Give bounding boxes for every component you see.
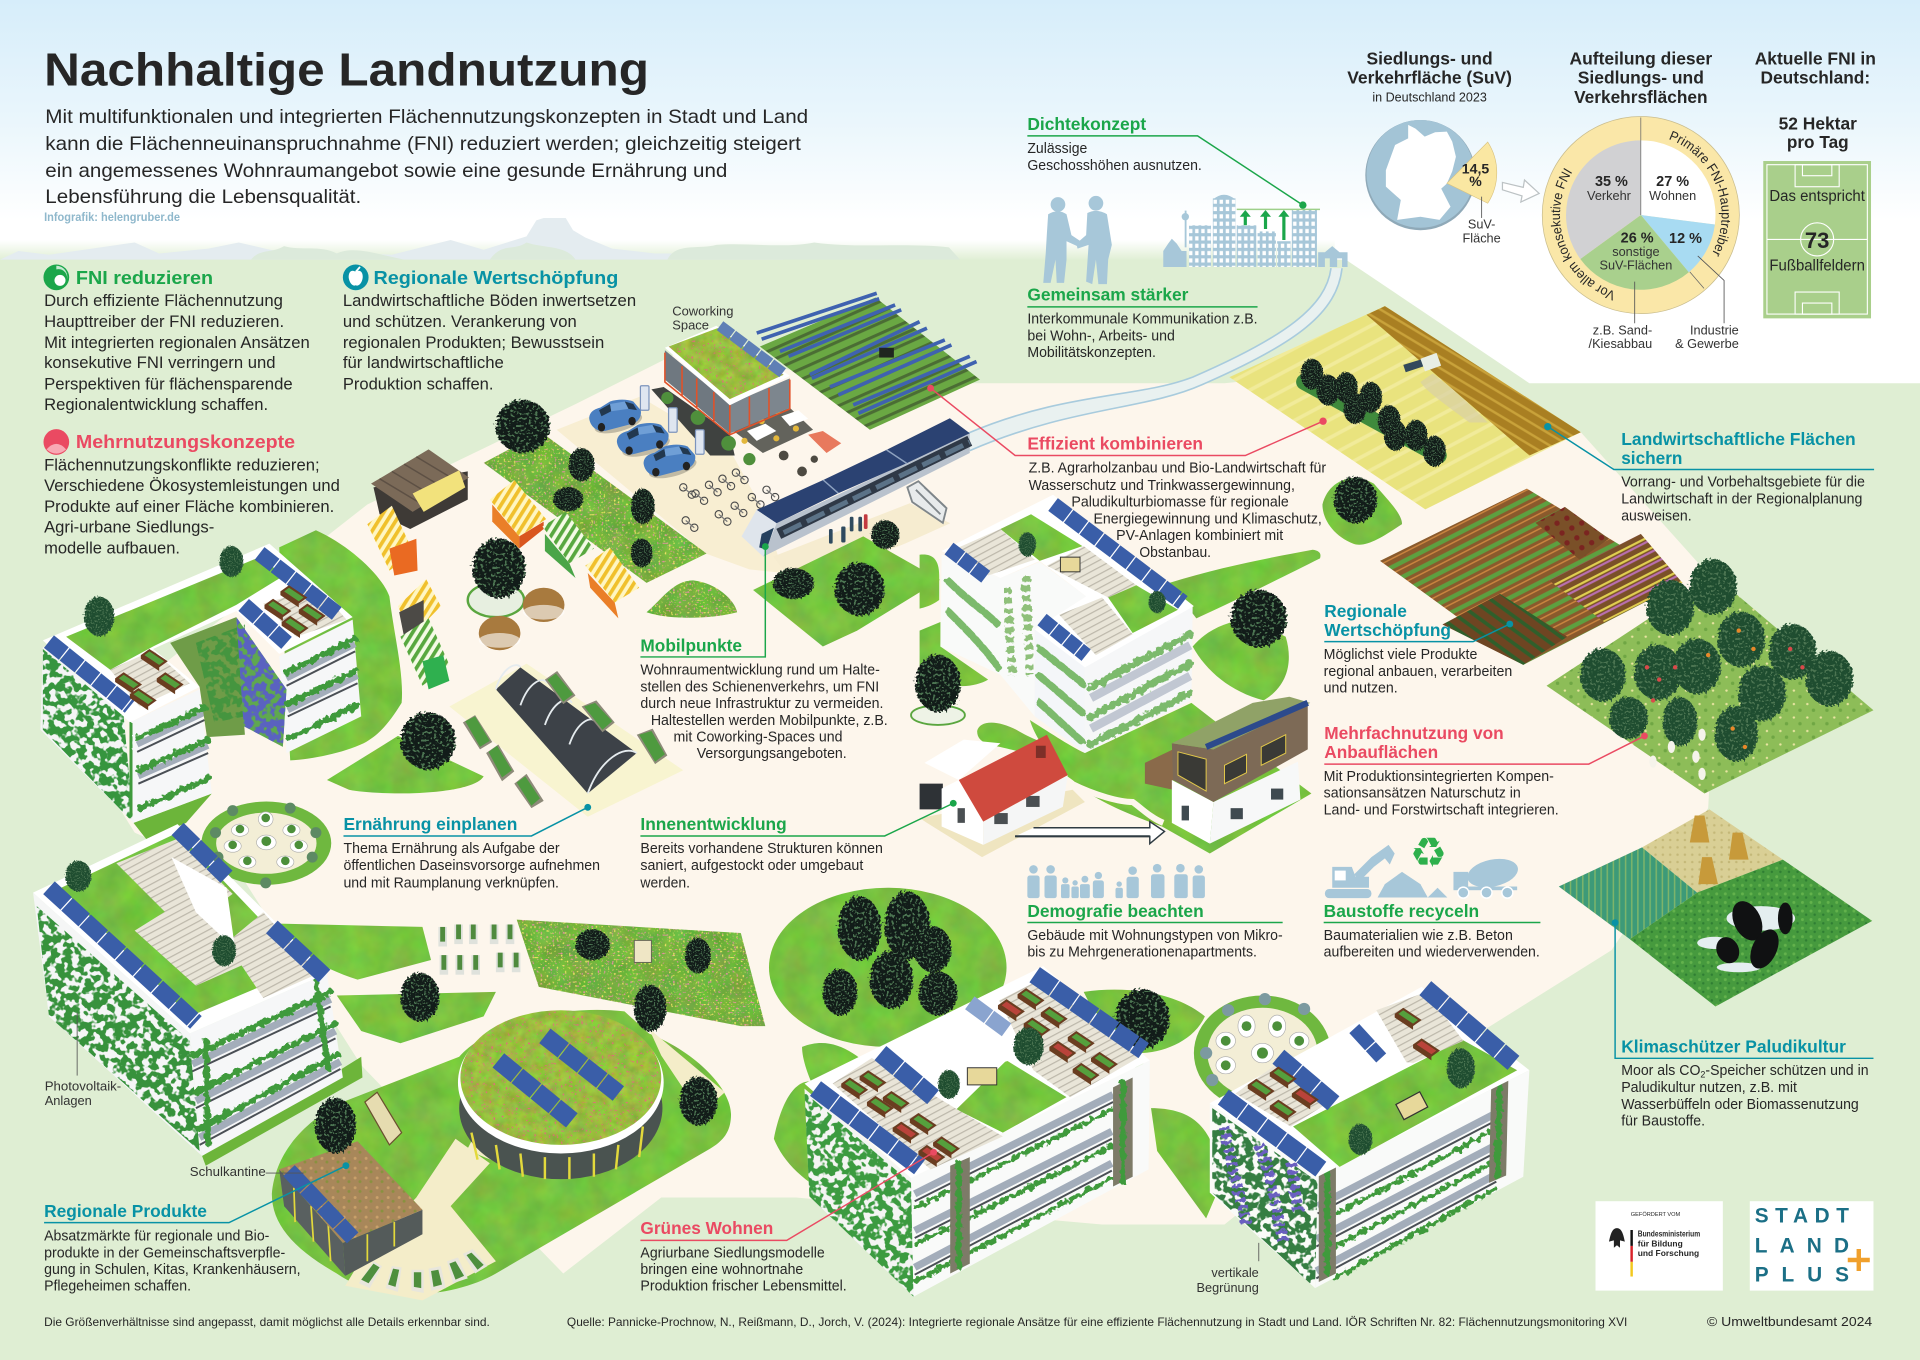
commuters [829,514,868,544]
building: middle left [33,824,362,1166]
callout: Effizient kombinieren [927,385,1327,561]
callout: Regionale Wertschöpfung: Wertschöpfung [1324,620,1451,640]
body text: Landwirtschaftliche Böden inwertsetzen [343,292,636,310]
planter tree [468,539,525,617]
field: vegetables [1380,489,1682,665]
tree behind building [1116,989,1169,1049]
body text: Haupttreiber der FNI reduzieren. [44,313,284,331]
callout: Mobilpunkte: Mobilpunkte [640,635,742,655]
callout: Regionale Produkte: Absatzmärkte für regionale und Bio- [44,1228,270,1244]
callout: Baustoffe recyceln: Baumaterialien wie z.B. Beton [1324,928,1513,944]
callout: Regionale Wertschöpfung: und nutzen. [1324,681,1398,697]
callout: Demografie beachten: bis zu Mehrgenerationenapartments. [1027,944,1257,960]
curved ring label right: Primäre FNI-Hauptreiber [1669,130,1730,257]
body text: Produkte auf einer Fläche kombinieren. [44,498,334,516]
football field [1763,161,1871,318]
value label [1462,160,1489,189]
label vertikale Begrünung [1197,1243,1259,1295]
icon: apple [343,264,369,290]
callout: Landwirtschaftliche Flächen sichern: Landwirtschaft in der Regionalplanung [1621,492,1862,508]
callout: Grünes Wohnen: Agriurbane Siedlungsmodelle [640,1245,825,1261]
label Photovoltaik-Anlagen: Anlagen [45,1093,92,1108]
percentage labels [1587,174,1702,272]
heading [1347,48,1512,105]
body text: Flächennutzungskonflikte reduzieren; [44,457,320,475]
callout: Regionale Produkte: Regionale Produkte [44,1201,207,1221]
callout: Dichtekonzept: Zulässige [1027,141,1087,157]
round tables [479,588,564,650]
callout: Regionale Wertschöpfung [1324,601,1513,697]
heading: in Deutschland 2023 [1372,90,1487,105]
body text: Regionalentwicklung schaffen. [44,396,268,414]
callout: Regionale Wertschöpfung: regional anbauen, verarbeiten [1324,664,1512,680]
logo: Bundesministerium: Bundesministerium [1638,1229,1700,1239]
callout: Klimaschützer Paludikultur: Klimaschützer Paludikultur [1621,1037,1846,1057]
callout: Ernährung einplanen: und mit Raumplanung verknüpfen. [343,875,559,891]
label Schulkantine [190,1164,304,1179]
wedge Industrie [1641,215,1715,272]
roof [43,544,353,722]
curved ring path left [1560,163,1616,292]
grass behind [279,530,402,760]
cars [589,400,699,482]
cream development area [73,349,1720,1273]
intro text: Mit multifunktionalen und integrierten Flächennutzungskonzepten in Stadt und Land [45,106,808,128]
sky background [0,0,1920,220]
heading: Verkehrfläche (SuV) [1347,67,1512,87]
callout: Mehrfachnutzung von Anbauflächen: Land- und Forstwirtschaft integrieren. [1324,803,1559,819]
ring dividers [1641,118,1704,288]
percentage labels: Verkehr [1587,188,1632,203]
icon: two people shaking hands [1043,196,1112,284]
callout: Grünes Wohnen: Produktion frischer Lebensmittel. [640,1279,847,1295]
raised beds [841,988,1118,1167]
logo: Bundesministerium: GEFÖRDERT VOM [1631,1211,1681,1218]
walls [40,647,133,823]
hut [371,449,469,529]
callout: Klimaschützer Paludikultur: Moor als CO [1621,1063,1702,1079]
value: 52 Hektar [1779,113,1857,133]
callout SuV-Fläche: Fläche [1463,230,1501,245]
value label: % [1469,173,1482,189]
body text [44,457,340,557]
logo: Bundesministerium: und Forschung [1638,1248,1699,1258]
icon: excavator, mixer truck and recycling [1325,828,1521,898]
callout: Mobilpunkte [640,543,888,762]
modern house [1145,697,1310,844]
value: pro Tag [1787,132,1849,152]
curved ring label left: Vor allem konsekutive FNI [1550,168,1613,301]
callout Industrie [1675,256,1739,351]
callout: Mobilpunkte: Versorgungsangeboten. [697,746,847,762]
distant hills and treeline [0,218,960,260]
body text [343,292,636,393]
label Schulkantine: Schulkantine [190,1164,266,1179]
body text: Verschiedene Ökosystemleistungen und [44,477,340,495]
callout Sand/Kiesabbau [1589,282,1652,351]
callout: Demografie beachten [1027,901,1283,960]
logo: Stadt Land Plus [1750,1201,1873,1291]
callout: Innenentwicklung: Innenentwicklung [640,814,787,834]
callout: Landwirtschaftliche Flächen sichern: Vorrang- und Vorbehaltsgebiete für die [1621,475,1865,491]
callout: Gemeinsam stärker: Mobilitätskonzepten. [1027,345,1156,361]
heading: Siedlungs- und [1367,48,1493,68]
callout: Dichtekonzept [1027,114,1307,209]
chart: Siedlungs- und Verkehrsfläche [1347,48,1512,245]
callout: Grünes Wohnen [640,1149,937,1295]
callout: Landwirtschaftliche Flächen sichern: ausweisen. [1621,508,1692,524]
body text: Perspektiven für flächensparende [44,375,293,393]
icon: FNI reduzieren [43,264,69,290]
percentage labels: 27 % [1656,174,1689,190]
wedge Wohnen [1641,140,1715,224]
raised beds [1248,1008,1440,1122]
label Coworking Space: Space [672,317,709,332]
pale connector road [967,268,1342,451]
body text: und schützen. Verankerung von [343,313,577,331]
school campus [272,985,731,1300]
icon: city skyline [1163,195,1348,267]
callout: Ernährung einplanen [343,804,600,891]
callout: Ernährung einplanen: öffentlichen Daseinsvorsorge aufnehmen [343,858,600,874]
cafe terrace [651,387,841,476]
callout: Baustoffe recyceln: aufbereiten und wiederverwenden. [1324,944,1540,960]
building: central [940,495,1194,753]
label Photovoltaik-Anlagen: Photovoltaik- [45,1079,121,1094]
label Coworking Space [672,303,733,332]
callout: Regionale Produkte: produkte in der Gemeinschaftsverpfle- [44,1245,285,1261]
callout: Mehrfachnutzung von Anbauflächen: Anbauflächen [1324,742,1438,762]
tram platform [773,503,950,588]
callout: Innenentwicklung: Bereits vorhandene Strukturen können [640,841,883,857]
building: bottom center [804,966,1150,1297]
callout: Effizient kombinieren: PV-Anlagen kombiniert mit [1116,528,1283,544]
heading: Mehrnutzungskonzepte [76,432,295,452]
small tree island [1322,477,1402,545]
small flower lawn [647,580,737,618]
callout: Ernährung einplanen: Ernährung einplanen [343,814,517,834]
circular garden lower right [1194,993,1331,1111]
callout: Effizient kombinieren: Effizient kombinieren [1027,433,1203,453]
red roof house [920,735,1085,857]
heading [1755,48,1876,87]
building: upper left [40,530,402,840]
horizon fade [0,240,1335,261]
trees plaza [496,400,899,616]
intro text: Lebensführung die Lebensqualität. [45,186,361,208]
label vertikale Begrünung: vertikale [1211,1265,1259,1280]
circular garden [201,802,331,888]
panel: Mehrnutzungskonzepte [43,429,340,557]
copyright: © Umweltbundesamt 2024 [1707,1314,1872,1329]
heading: Regionale Wertschöpfung [373,268,618,288]
football field: Fußballfeldern [1769,258,1865,275]
value label: 14,5 [1462,160,1489,176]
callout: Mobilpunkte: Wohnraumentwicklung rund um Halte- [640,663,880,679]
logo: Stadt Land Plus: PLUS [1755,1264,1849,1287]
body text: regionalen Produkten; Bewusstsein [343,334,604,352]
trees central [911,590,1287,725]
callout: Mobilpunkte: stellen des Schienenverkehrs, um FNI [640,680,879,696]
market stalls [367,480,639,689]
value [1779,113,1857,152]
logo: Bundesministerium [1596,1201,1723,1291]
body text [44,292,310,414]
globe with Germany map [1365,120,1476,230]
arrow: house conversion [1015,822,1164,844]
callout: Regionale Wertschöpfung: Regionale [1324,601,1407,621]
heading: Siedlungs- und [1578,67,1704,87]
callout: Landwirtschaftliche Flächen sichern [1544,423,1874,524]
paths [471,1133,637,1161]
chart: Aufteilung donut [1542,48,1740,351]
arrow: to breakdown [1502,180,1539,202]
callout Sand/Kiesabbau: /Kiesabbau [1589,336,1652,351]
greenhouse [449,664,683,817]
label vertikale Begrünung: Begrünung [1197,1280,1259,1295]
logo: Stadt Land Plus: LAND [1755,1235,1849,1258]
orchard lawn circle [769,888,1007,1047]
percentage labels: 12 % [1669,231,1702,247]
lawn behind bottom building [774,990,1205,1200]
wedge Verkehr [1566,140,1641,259]
lawn strip and beds [263,923,520,1043]
body text: Durch effiziente Flächennutzung [44,292,283,310]
callout: Innenentwicklung: werden. [639,875,690,891]
percentage labels: sonstige [1612,244,1660,259]
field: solar agriculture [757,293,980,430]
callout: Innenentwicklung [639,800,957,891]
footer note: Die Größenverhältnisse sind angepasst, damit möglichst alle Details erkennbar sind. [44,1315,490,1329]
wedge sonstige [1580,215,1689,290]
callout: Landwirtschaftliche Flächen sichern: Landwirtschaftliche Flächen [1621,429,1856,449]
callout: Dichtekonzept: Geschosshöhen ausnutzen. [1027,158,1202,174]
percentage labels: 35 % [1595,174,1628,190]
panel: Regionale Wertschöpfung [343,264,636,393]
heading: Verkehrsflächen [1574,87,1708,107]
heading: Aufteilung dieser [1569,48,1712,68]
percentage labels: Wohnen [1649,188,1696,203]
vertical garden [170,617,245,737]
heading: Aktuelle FNI in [1755,48,1876,68]
tram [742,418,970,557]
callout: Regionale Produkte: Pflegeheimen schaffen. [44,1279,191,1295]
bicycles [680,469,779,531]
callout: Mehrfachnutzung von Anbauflächen: Mehrfachnutzung von [1324,723,1504,743]
outer ring [1542,116,1739,314]
campus lawn [272,1010,731,1294]
body text: für landwirtschaftliche [343,354,504,372]
curved ring path right [1668,139,1722,261]
label Coworking Space: Coworking [672,303,733,318]
source line: Quelle: Pannicke-Prochnow, N., Reißmann, D., Jorch, V. (2024): Integrierte regionale Ansätze für eine effiziente Flächennutzung in Stadt und Land. IÖR Schriften Nr. 82: Flächennutzungsmonitoring XVI [567,1315,1627,1329]
field: paludiculture [1559,809,1872,1007]
callout Industrie: Industrie [1690,322,1739,337]
body text: Produktion schaffen. [343,375,493,393]
canteen [279,1169,345,1276]
callout: Effizient kombinieren: Wasserschutz und Trinkwassergewinnung, [1029,478,1295,494]
flower meadow [517,920,765,1026]
callout: Effizient kombinieren: Obstanbau. [1139,545,1211,561]
label Photovoltaik-Anlagen [45,1013,121,1108]
callout: Regionale Wertschöpfung: Möglichst viele Produkte [1324,647,1477,663]
callout: Demografie beachten: Demografie beachten [1027,901,1204,921]
panel: Aktuelle FNI [1755,48,1876,318]
callout: Demografie beachten: Gebäude mit Wohnungstypen von Mikro- [1027,928,1283,944]
callout: Grünes Wohnen: bringen eine wohnortnahe [640,1262,803,1278]
icon: Mehrnutzung [43,429,69,455]
callout: Innenentwicklung: saniert, aufgestockt oder umgebaut [640,858,863,874]
body text: modelle aufbauen. [44,539,180,557]
callout: Landwirtschaftliche Flächen sichern: sichern [1621,448,1682,468]
raised beds [115,585,326,710]
body text: Mit integrierten regionalen Ansätzen [44,334,310,352]
callout: Ernährung einplanen: Thema Ernährung als Aufgabe der [343,841,560,857]
building: bottom right [1210,987,1529,1288]
callout: Klimaschützer Paludikultur: Paludikultur nutzen, z.B. mit [1621,1080,1797,1096]
body text: Agri-urbane Siedlungs- [44,519,214,537]
logo: Bundesministerium: für Bildung [1638,1239,1683,1249]
callout: Mobilpunkte: Haltestellen werden Mobilpunkte, z.B. [651,713,888,729]
icon: excavator, mixer truck and recycling: ♻ [1410,828,1447,877]
callout: Baustoffe recyceln [1324,901,1540,960]
callout: Mobilpunkte: mit Coworking-Spaces und [673,730,842,746]
callout: Klimaschützer Paludikultur: Wasserbüffeln oder Biomassenutzung [1621,1097,1859,1113]
callout: Gemeinsam stärker [1027,285,1258,361]
heading [1569,48,1712,107]
lawn with tree [327,712,484,793]
raised beds [359,1249,487,1293]
charging pillars [640,386,704,454]
callout Sand/Kiesabbau: z.B. Sand- [1593,322,1652,337]
callout SuV-Fläche [1463,197,1501,245]
callout: Dichtekonzept: Dichtekonzept [1027,114,1146,134]
callout Industrie: & Gewerbe [1675,336,1739,351]
logo: Stadt Land Plus: STADT [1755,1205,1849,1228]
title: Nachhaltige Landnutzung [44,44,649,96]
lawn by tram [753,536,940,647]
trees and play [315,1098,356,1153]
callout: Gemeinsam stärker: Interkommunale Kommunikation z.B. [1027,311,1258,327]
callout: Regionale Produkte [44,1162,349,1295]
callout: Klimaschützer Paludikultur: für Baustoffe. [1621,1113,1705,1129]
callout: Regionale Produkte: gung in Schulen, Kitas, Krankenhäusern, [44,1262,301,1278]
field: wheat with combine [1229,306,1581,509]
body text: konsekutive FNI verringern und [44,354,276,372]
meadow by plaza [484,432,707,583]
callout: Effizient kombinieren: Energiegewinnung und Klimaschutz, [1093,511,1322,527]
callout: Gemeinsam stärker: bei Wohn-, Arbeits- und [1027,328,1175,344]
panel: FNI reduzieren [43,264,310,414]
callout: Klimaschützer Paludikultur [1612,919,1873,1129]
vines [43,649,133,823]
stairs to tram [907,481,947,523]
icon: people of different ages [1027,864,1205,898]
football field: 73 [1805,228,1829,253]
percentage labels: 26 % [1621,230,1654,246]
callout: Gemeinsam stärker: Gemeinsam stärker [1027,285,1189,305]
credit: Infografik: helengruber.de [44,211,180,224]
field: orchard with sheep [1547,559,1873,793]
callout: Mehrfachnutzung von Anbauflächen: Mit Produktionsintegrierten Kompen- [1324,769,1554,785]
round building [459,1037,662,1179]
callout: Mehrfachnutzung von Anbauflächen: sationsansätzen Naturschutz in [1324,786,1521,802]
heading: Deutschland: [1761,67,1870,87]
football field: Das entspricht [1769,188,1865,205]
callout: Mehrfachnutzung von Anbauflächen [1324,723,1648,819]
pie wedge 14,5 percent [1447,142,1497,203]
heading: FNI reduzieren [76,268,213,288]
building: Coworking Space [665,326,790,435]
intro text: ein angemessenes Wohnraumangebot sowie eine gesunde Ernährung und [45,160,727,182]
callout: Effizient kombinieren: Paludikulturbiomasse für regionale [1071,495,1289,511]
callout: Grünes Wohnen: Grünes Wohnen [640,1218,773,1238]
lawns around central building [920,550,1320,853]
lawn between buildings [1151,1108,1224,1218]
callout: Mobilpunkte: durch neue Infrastruktur zu vermeiden. [640,696,883,712]
callout SuV-Fläche: SuV- [1468,216,1495,231]
percentage labels: SuV-Flächen [1600,257,1672,272]
callout: Klimaschützer Paludikultur: 2 [1700,1070,1705,1080]
intro text: kann die Flächenneuinanspruchnahme (FNI) reduziert werden; gleichzeitig steigert [45,133,801,155]
callout: Baustoffe recyceln: Baustoffe recyceln [1324,901,1479,921]
callout: Effizient kombinieren: Z.B. Agrarholzanbau und Bio-Landwirtschaft für [1029,461,1326,477]
plaza paving [557,397,783,573]
intro text [45,106,808,208]
callout: Klimaschützer Paludikultur: -Speicher schützen und in [1705,1063,1869,1079]
